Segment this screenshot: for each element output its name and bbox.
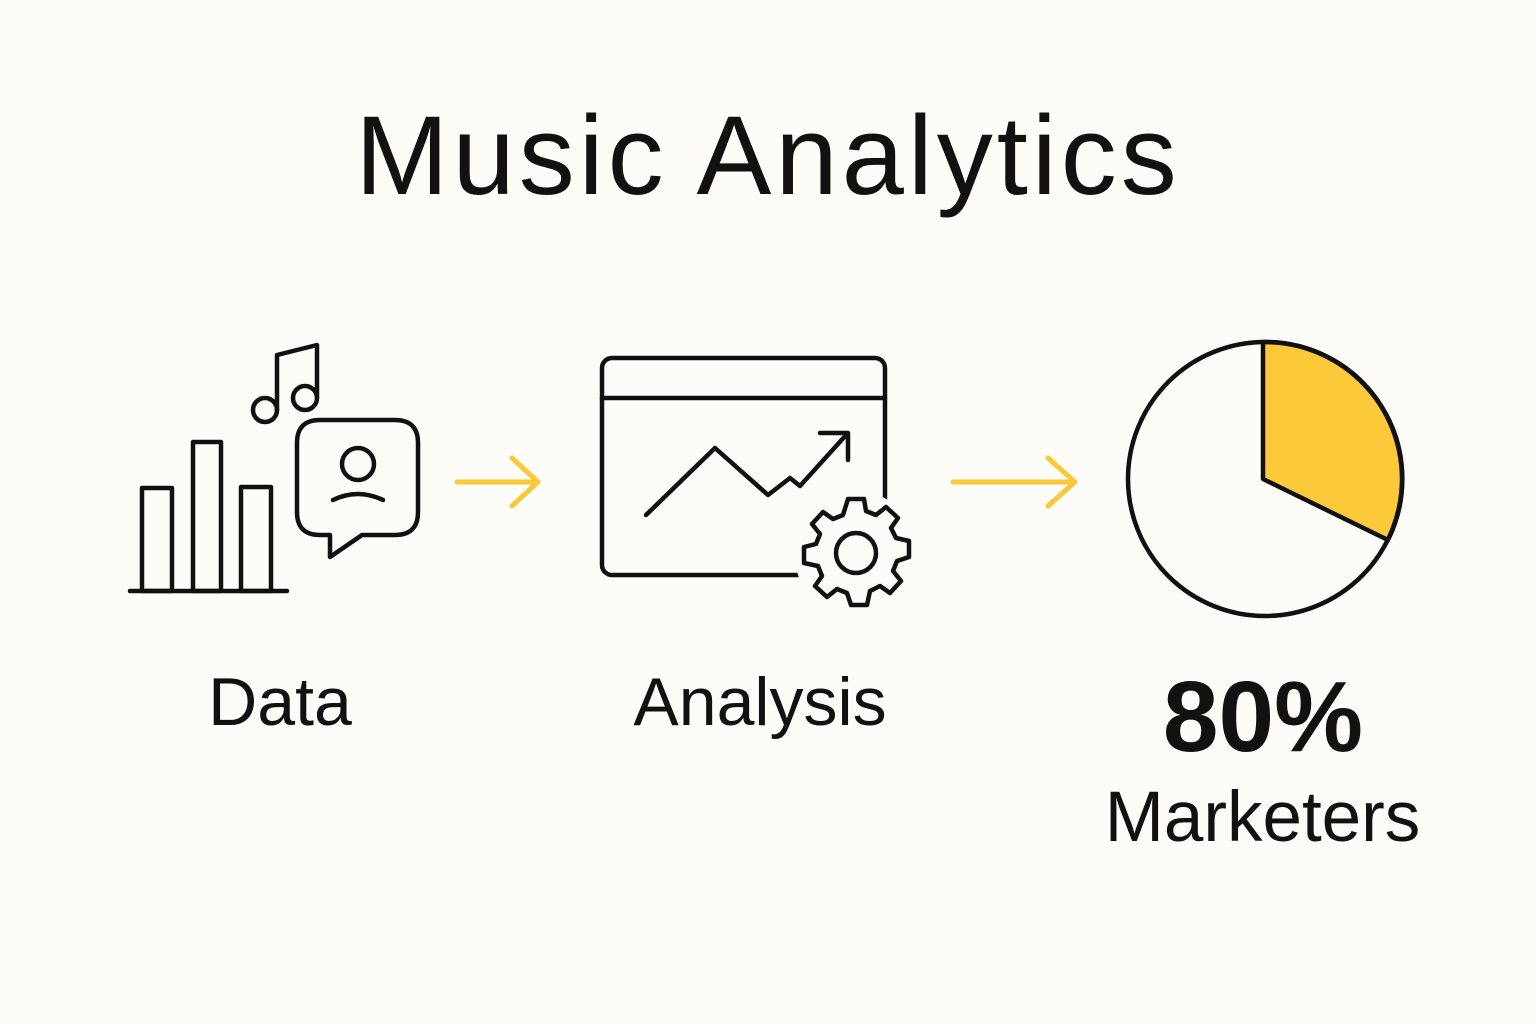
- label: Marketers: Marketers: [1105, 778, 1420, 857]
- title: Music Analytics: [355, 93, 1181, 218]
- icon: data: [128, 342, 420, 594]
- arrow 1: [454, 456, 540, 508]
- label: Data: Data: [208, 664, 352, 740]
- pie chart: [1126, 340, 1405, 618]
- label: Analysis: Analysis: [633, 664, 887, 740]
- stat: 80%: 80%: [1163, 661, 1363, 773]
- icon: analysis window: [600, 356, 912, 608]
- arrow 2: [950, 456, 1078, 508]
